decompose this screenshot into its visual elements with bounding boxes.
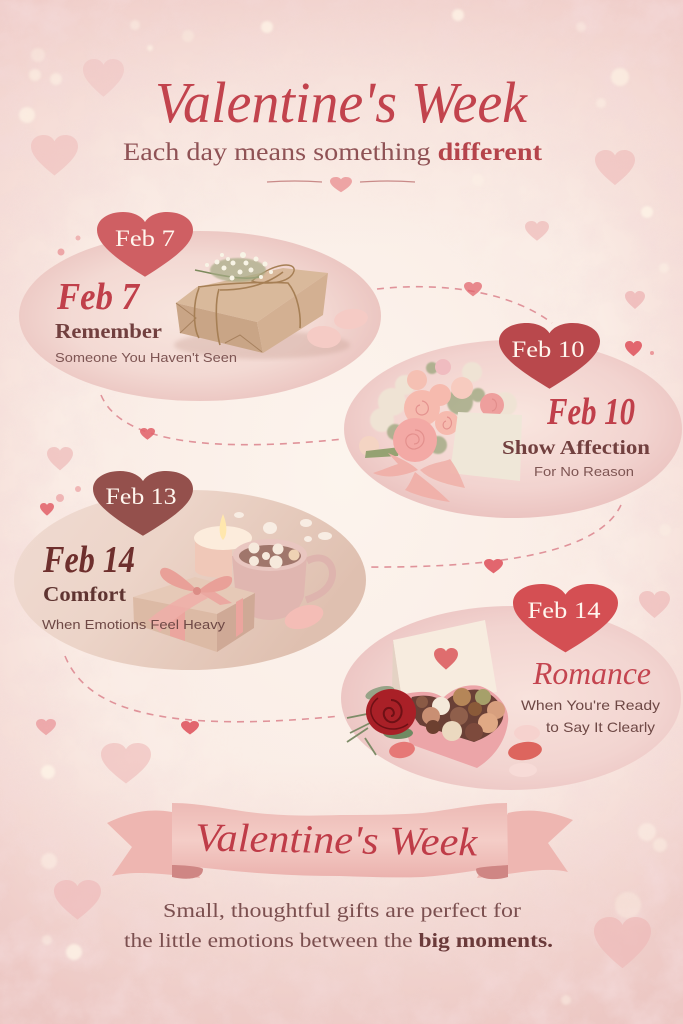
script heading: Romance: [532, 655, 651, 691]
heart date badge: Feb 10: [512, 337, 584, 362]
panel: Feb 14 romance: [341, 584, 681, 790]
panel background oval: [14, 490, 366, 670]
panel background oval: [19, 231, 381, 401]
heart date badge: [97, 212, 193, 277]
closing message: [124, 900, 553, 952]
ribbon banner: [107, 803, 573, 879]
icon: lit candle: [194, 514, 252, 578]
heading: Remember: [55, 319, 162, 343]
heart date badge: Feb 14: [528, 598, 601, 623]
script date: Feb 7: [56, 276, 141, 318]
panel background oval: [341, 606, 681, 790]
icon: rose bouquet with card: [359, 359, 522, 502]
icon: rose petals: [306, 307, 369, 349]
baby's breath sprig: [195, 252, 273, 282]
panel: Feb 10 show affection: [344, 323, 682, 518]
icon: petal: [282, 600, 326, 634]
panel background oval: [344, 340, 682, 518]
heading: Comfort: [43, 582, 126, 606]
icon: gift box with bow: [133, 568, 255, 652]
icon: red rose: [347, 683, 416, 755]
panel: Feb 7 remember: [19, 212, 381, 401]
heart date badge: [513, 584, 618, 652]
pink ribbon bow: [373, 453, 465, 502]
icon: pebbles: [234, 512, 332, 542]
script date: Feb 14: [42, 539, 135, 581]
icon: cocoa mug: [232, 539, 333, 620]
dashed path connectors: [65, 287, 621, 722]
connector hearts: [36, 236, 654, 735]
icon: heart box of chocolates: [404, 685, 508, 768]
heart date badge: [93, 471, 193, 536]
heart date badge: Feb 7: [115, 226, 175, 251]
icon: kraft gift box: [174, 252, 350, 359]
title divider heart: [267, 177, 415, 192]
description: to Say It Clearly: [546, 719, 655, 735]
banner script text: Valentine's Week: [195, 815, 479, 864]
closing message: Small, thoughtful gifts are perfect for: [163, 900, 521, 922]
script date: Feb 10: [546, 391, 635, 433]
description: When Emotions Feel Heavy: [42, 617, 226, 632]
description: Someone You Haven't Seen: [55, 350, 237, 365]
icon: greeting card: [392, 620, 497, 700]
blank card: [450, 412, 522, 481]
title: Valentine's Week: [155, 70, 528, 135]
icon: scattered petals: [388, 725, 543, 777]
description: When You're Ready: [521, 697, 660, 713]
description: For No Reason: [534, 464, 634, 479]
description: [521, 697, 660, 735]
subtitle: Each day means something different: [123, 139, 543, 166]
heart date badge: Feb 13: [106, 484, 176, 509]
heading: Show Affection: [502, 437, 650, 459]
heart date badge: [499, 323, 600, 389]
panel: Feb 13 comfort: [14, 471, 366, 670]
closing message: the little emotions between the big moments.: [124, 930, 553, 952]
